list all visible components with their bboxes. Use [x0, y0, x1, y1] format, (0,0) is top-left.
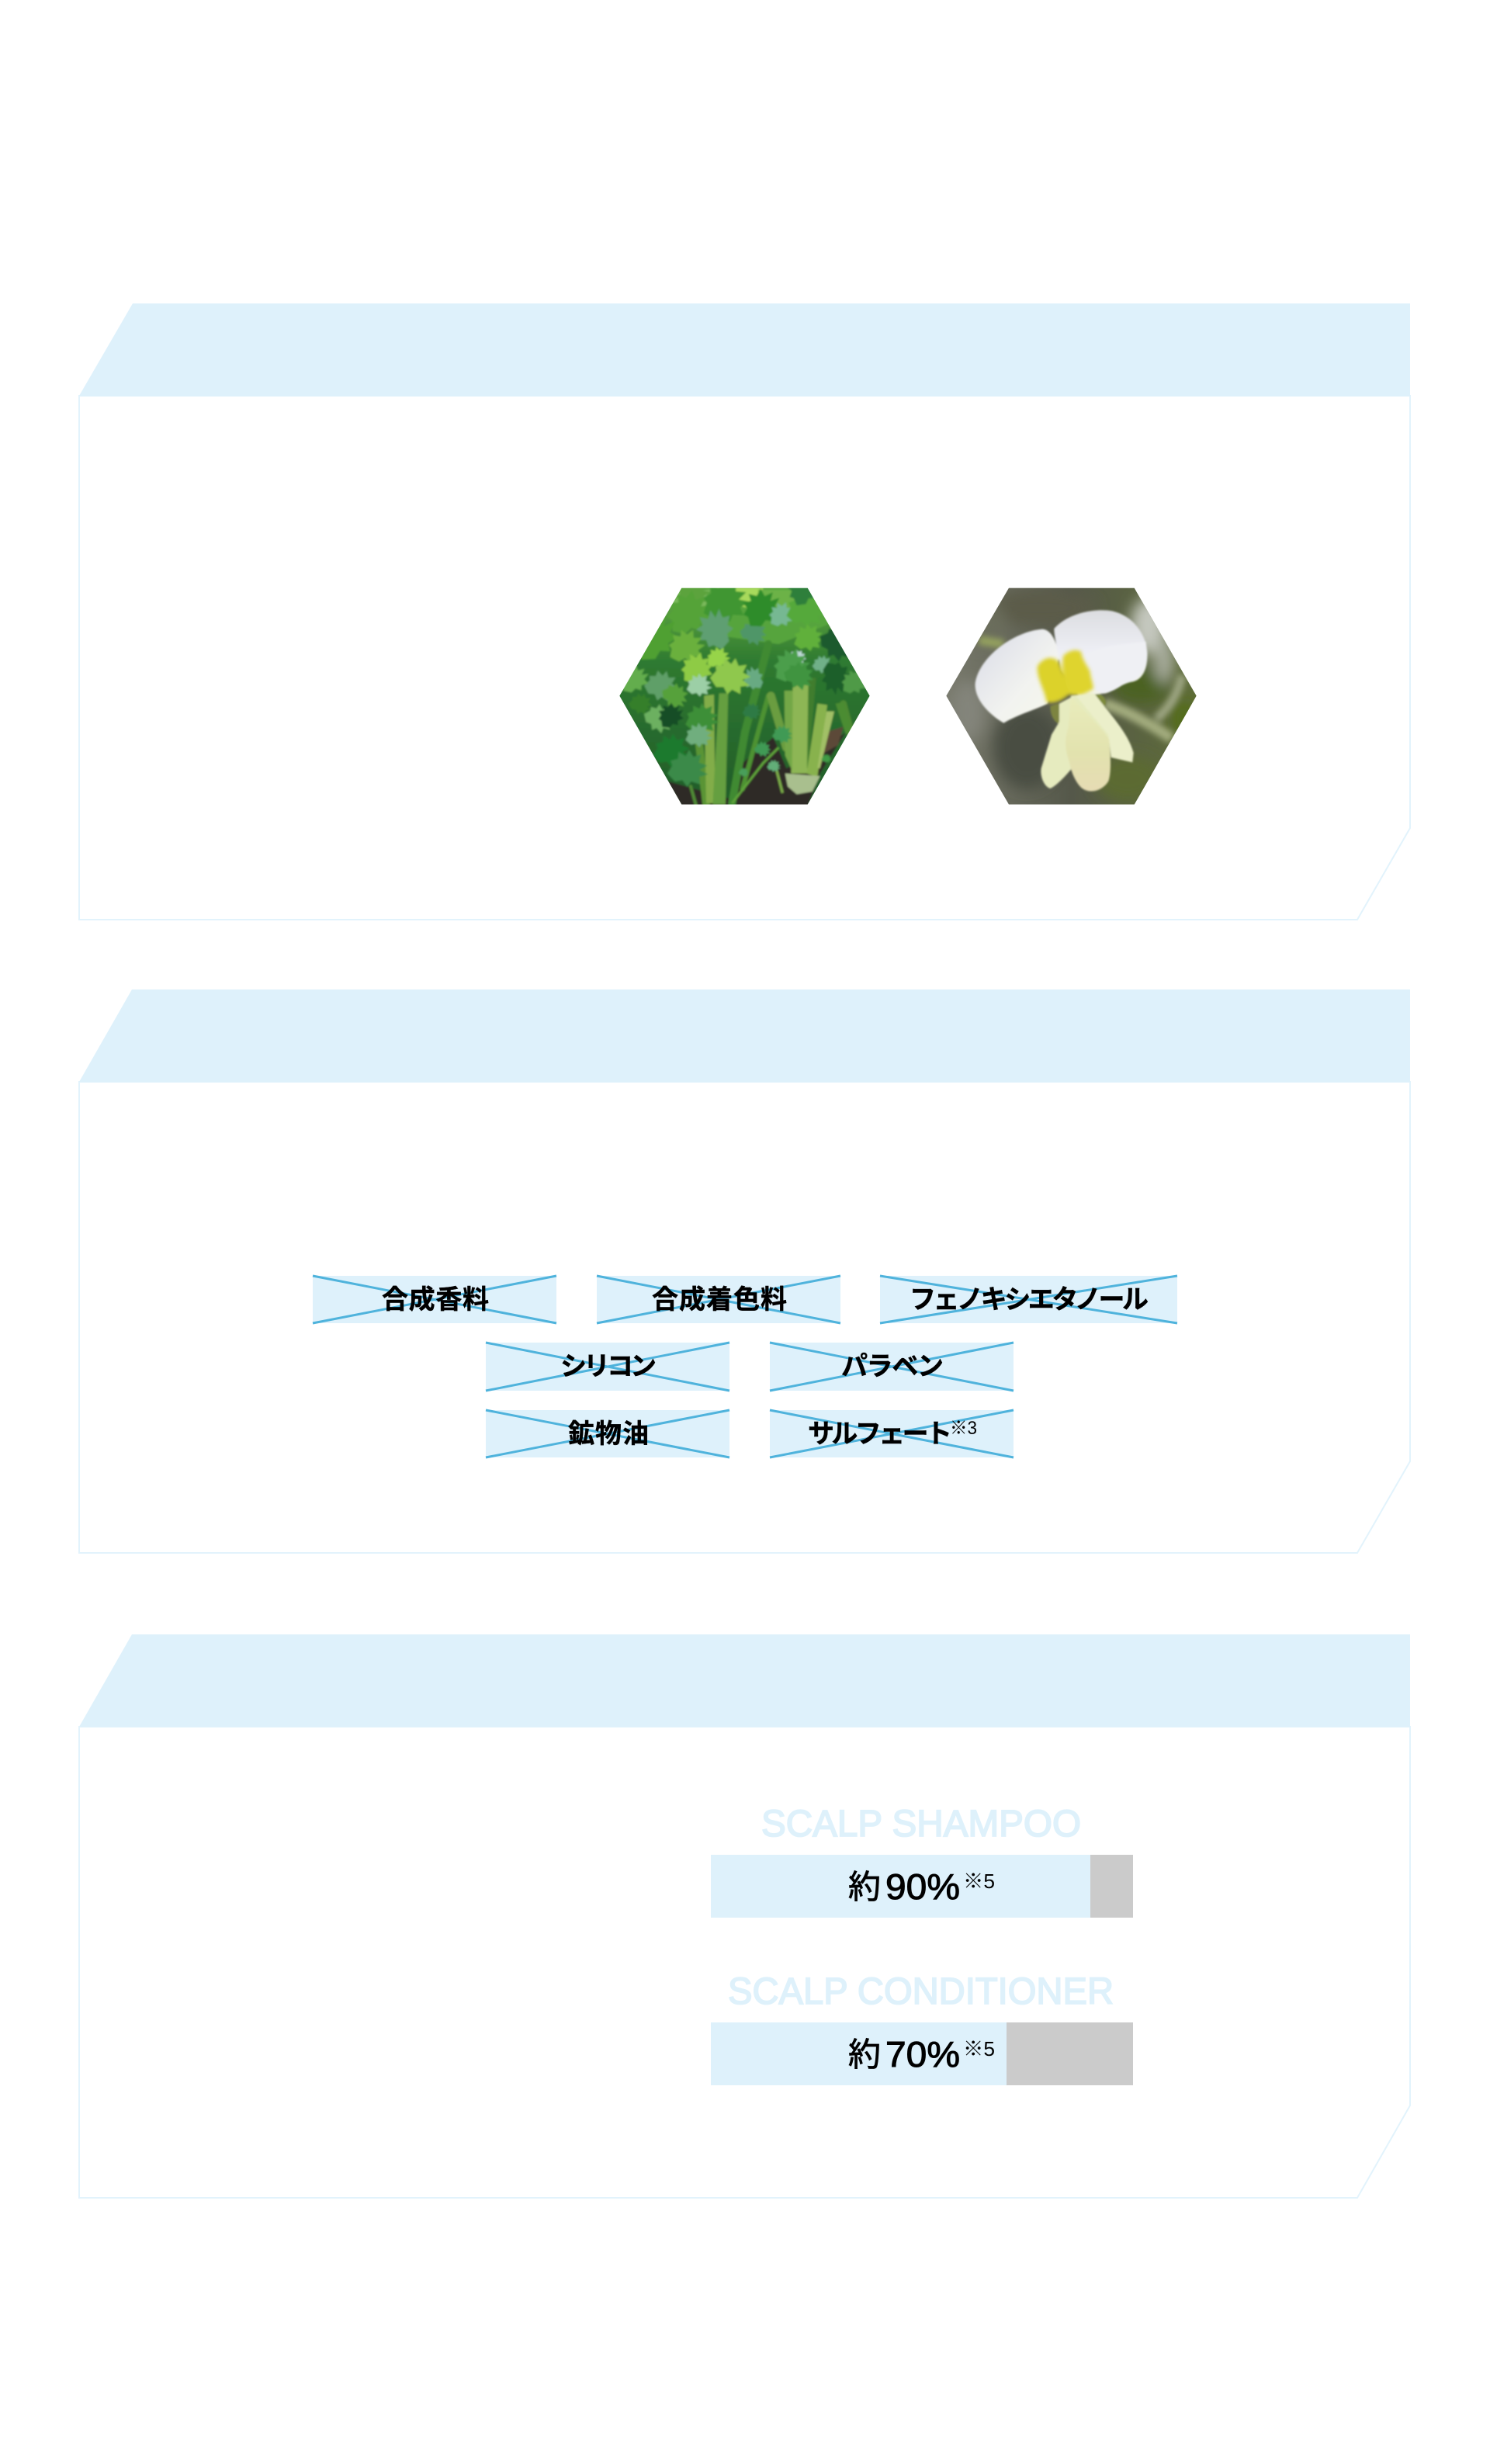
panel: third section — [79, 1634, 1410, 2198]
bar chart: shampoo about 90% — [711, 1855, 1133, 1918]
bar chart: shampoo about 90%: ※5 — [963, 1870, 995, 1893]
right petal — [1054, 610, 1147, 696]
top bright foliage — [705, 588, 829, 644]
tag: sulfate: ※3 — [950, 1418, 977, 1439]
small sepals — [1050, 704, 1059, 724]
bar chart: conditioner about 70% — [711, 2022, 1133, 2085]
tag: sulfate — [770, 1410, 1014, 1457]
photo: celery hexagon — [619, 588, 870, 805]
tag: mineral oil — [486, 1410, 729, 1457]
tag: paraben — [770, 1343, 1014, 1391]
tag: phenoxyethanol: フェノキシエタノール — [910, 1285, 1149, 1315]
left petal — [975, 629, 1059, 723]
lower keel petals — [1070, 694, 1110, 740]
label: scalp conditioner: SCALP CONDITIONER — [728, 1971, 1114, 2012]
upper leaves — [613, 567, 871, 788]
bar chart: shampoo about 90%: 90% — [885, 1866, 960, 1907]
panel body: first section — [79, 396, 1410, 920]
panel: first section — [79, 303, 1410, 920]
tag: synthetic fragrance: 合成香料 — [382, 1285, 489, 1315]
tag: synthetic fragrance — [313, 1276, 556, 1323]
tag: synthetic colorant: 合成着色料 — [652, 1285, 787, 1315]
soil — [667, 732, 846, 806]
back stalks — [691, 644, 851, 805]
tag: silicone — [486, 1343, 729, 1391]
main stalks — [704, 695, 716, 803]
yellow centre — [1038, 650, 1093, 703]
bar chart: conditioner about 70%: ※5 — [963, 2037, 995, 2060]
small foreground sprig — [754, 741, 771, 757]
panel: second section — [79, 989, 1410, 1553]
header band: third section — [79, 1634, 1410, 1727]
bar chart: conditioner about 70%: 70% — [885, 2034, 960, 2074]
header band: second section — [79, 989, 1410, 1082]
bar chart: shampoo about 90%: 約 — [848, 1869, 881, 1905]
tag: phenoxyethanol — [880, 1276, 1177, 1323]
left foliage — [669, 630, 705, 663]
tag: silicone: シリコン — [560, 1352, 657, 1381]
panel body: second section — [79, 1082, 1410, 1553]
label: scalp shampoo: SCALP SHAMPOO — [761, 1804, 1081, 1845]
bright central leaf — [680, 652, 712, 683]
header band: first section — [79, 303, 1410, 396]
bar chart: conditioner about 70%: 約 — [848, 2036, 881, 2073]
tag: sulfate: サルフェート — [808, 1419, 952, 1449]
panel body: third section — [79, 1727, 1410, 2198]
tag: paraben: パラベン — [841, 1352, 944, 1381]
tag: mineral oil: 鉱物油 — [568, 1419, 649, 1449]
tag: synthetic colorant — [597, 1276, 840, 1323]
photo: white flower hexagon — [939, 582, 1203, 809]
